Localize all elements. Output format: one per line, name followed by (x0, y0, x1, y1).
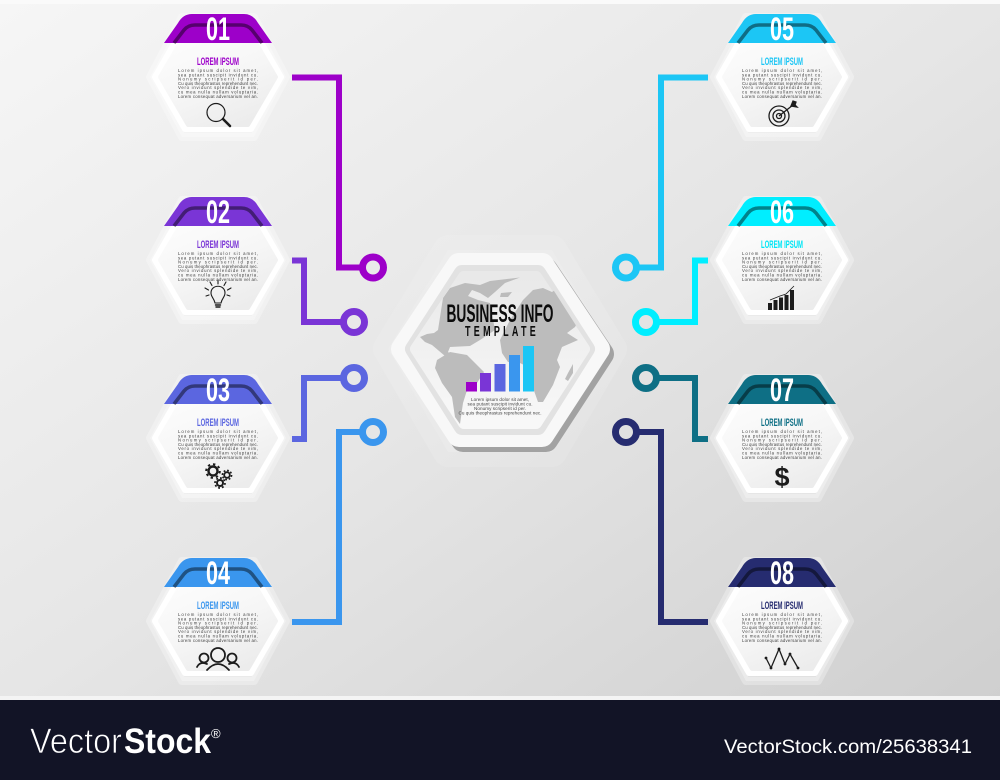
panel: card 06 (714, 194, 850, 320)
body text: Cu quis theophrastus reprehendunt nec. (742, 625, 822, 630)
panel: card 04 (150, 555, 286, 681)
icon: dollar: $ (774, 462, 790, 492)
body text (742, 251, 822, 282)
body text: Vero invidunt splendide te vim, (742, 268, 822, 273)
connector 6 cyan (636, 260, 708, 332)
body text (742, 612, 822, 643)
body text: sea putant suscipit invidunt cu. (742, 72, 822, 77)
body text: cu mea nulla nullam voluptaria. (178, 450, 258, 456)
subheading: TEMPLATE (465, 323, 536, 340)
body text: cu mea nulla nullam voluptaria. (742, 634, 822, 638)
body text: Nonumy scripserit id per. (742, 438, 822, 443)
body text: Lorem consequat adversarium vel an. (178, 455, 258, 460)
body text: cu mea nulla nullam voluptaria. (178, 634, 258, 638)
body text: Lorem ipsum dolor sit amet, (742, 68, 822, 73)
connector 4 blue (292, 422, 384, 622)
body text: Lorem consequat adversarium vel an. (742, 94, 822, 99)
footer logo: Stock (124, 722, 211, 761)
number tab: 03 (206, 372, 230, 408)
panel: card 05 (714, 11, 850, 137)
body text: cu mea nulla nullam voluptaria. (742, 90, 822, 94)
connector 7 teal (636, 368, 708, 439)
body text: cu mea nulla nullam voluptaria. (742, 450, 822, 456)
body text: sea putant suscipit invidunt cu. (178, 255, 258, 260)
body text: Cu quis theophrastus reprehendunt nec. (178, 625, 258, 630)
center text: Nonumy scripserit id per. (474, 406, 526, 411)
body text: Lorem consequat adversarium vel an. (742, 277, 822, 282)
body text: Lorem ipsum dolor sit amet, (742, 612, 822, 617)
body text: Vero invidunt splendide te vim, (178, 268, 258, 273)
body text: Vero invidunt splendide te vim, (742, 446, 822, 451)
title: LOREM IPSUM (197, 56, 239, 68)
world map (420, 278, 582, 424)
body text: Nonumy scripserit id per. (178, 77, 258, 82)
body text: Nonumy scripserit id per. (742, 260, 822, 265)
number tab: 02 (206, 194, 230, 230)
body text: Vero invidunt splendide te vim, (742, 629, 822, 634)
title: LOREM IPSUM (197, 239, 239, 251)
center text: Lorem ipsum dolor sit amet, (471, 397, 529, 402)
body text: Lorem consequat adversarium vel an. (742, 638, 822, 643)
body text: sea putant suscipit invidunt cu. (178, 616, 258, 621)
body text: Lorem ipsum dolor sit amet, (178, 68, 258, 73)
body text: Vero invidunt splendide te vim, (178, 85, 258, 90)
connector 8 navy (616, 422, 708, 622)
center text (458, 397, 542, 416)
body text: sea putant suscipit invidunt cu. (742, 433, 822, 438)
body text: sea putant suscipit invidunt cu. (178, 433, 258, 438)
bar chart (466, 346, 534, 392)
icon: magnifier (207, 104, 230, 126)
number tab: 05 (770, 11, 794, 47)
icon: target (769, 101, 797, 126)
icon: people (197, 648, 239, 670)
panel: card 03 (150, 372, 286, 498)
body text: Cu quis theophrastus reprehendunt nec. (742, 264, 822, 269)
heading: BUSINESS INFO (446, 300, 554, 328)
body text (178, 429, 258, 460)
body text: Cu quis theophrastus reprehendunt nec. (742, 442, 822, 447)
icon: zigzag line chart (765, 648, 799, 669)
icon: light bulb (205, 280, 231, 307)
panel: card 07 (714, 372, 850, 498)
body text: Cu quis theophrastus reprehendunt nec. (178, 264, 258, 269)
body text: Lorem ipsum dolor sit amet, (178, 612, 258, 617)
body text (742, 68, 822, 99)
body text: Cu quis theophrastus reprehendunt nec. (178, 442, 258, 447)
number tab: 06 (770, 194, 794, 230)
body text (178, 68, 258, 99)
title: LOREM IPSUM (761, 239, 803, 251)
title: LOREM IPSUM (761, 417, 803, 429)
body text: Vero invidunt splendide te vim, (178, 629, 258, 634)
body text (178, 612, 258, 643)
body text: Lorem consequat adversarium vel an. (178, 277, 258, 282)
body text: Nonumy scripserit id per. (178, 438, 258, 443)
body text: Vero invidunt splendide te vim, (178, 446, 258, 451)
body text: Nonumy scripserit id per. (742, 77, 822, 82)
title: LOREM IPSUM (197, 417, 239, 429)
body text: Lorem ipsum dolor sit amet, (742, 251, 822, 256)
connector 5 sky (616, 78, 708, 278)
panel: card 01 (150, 11, 286, 137)
title: LOREM IPSUM (761, 56, 803, 68)
title: LOREM IPSUM (197, 600, 239, 612)
connector 2 violet (292, 260, 364, 332)
body text: Lorem ipsum dolor sit amet, (178, 251, 258, 256)
body text: Lorem ipsum dolor sit amet, (178, 429, 258, 434)
connector 3 indigo (292, 368, 364, 439)
body text: Nonumy scripserit id per. (178, 260, 258, 265)
center text: sea putant suscipit invidunt cu. (468, 402, 532, 406)
body text: Lorem consequat adversarium vel an. (178, 638, 258, 643)
body text: Cu quis theophrastus reprehendunt nec. (178, 81, 258, 86)
body text: Nonumy scripserit id per. (178, 621, 258, 626)
body text: cu mea nulla nullam voluptaria. (178, 90, 258, 94)
footer logo: Vector (30, 722, 122, 761)
icon: growth chart (768, 286, 794, 310)
body text: Cu quis theophrastus reprehendunt nec. (742, 81, 822, 86)
central hexagon (388, 250, 612, 452)
footer logo (30, 722, 211, 761)
footer bar (0, 700, 1000, 780)
body text: cu mea nulla nullam voluptaria. (742, 272, 822, 278)
body text: Lorem consequat adversarium vel an. (178, 94, 258, 99)
number tab: 04 (206, 555, 230, 591)
title: LOREM IPSUM (761, 600, 803, 612)
body text (178, 251, 258, 282)
body text: Lorem ipsum dolor sit amet, (742, 429, 822, 434)
body text: sea putant suscipit invidunt cu. (742, 616, 822, 621)
registered mark: ® (211, 726, 221, 741)
body text: sea putant suscipit invidunt cu. (742, 255, 822, 260)
panel: card 08 (714, 555, 850, 681)
panel: card 02 (150, 194, 286, 320)
body text: sea putant suscipit invidunt cu. (178, 72, 258, 77)
body text: Lorem consequat adversarium vel an. (742, 455, 822, 460)
body text: Vero invidunt splendide te vim, (742, 85, 822, 90)
body text: cu mea nulla nullam voluptaria. (178, 272, 258, 278)
footer url: VectorStock.com/25638341 (724, 736, 972, 758)
body text: Nonumy scripserit id per. (742, 621, 822, 626)
connector 1 purple (292, 78, 384, 278)
number tab: 08 (770, 555, 794, 591)
body text (742, 429, 822, 460)
number tab: 07 (770, 372, 794, 408)
center text: Cu quis theophrastus reprehendunt nec. (458, 410, 542, 416)
icon: gears (206, 464, 232, 488)
number tab: 01 (206, 11, 230, 47)
